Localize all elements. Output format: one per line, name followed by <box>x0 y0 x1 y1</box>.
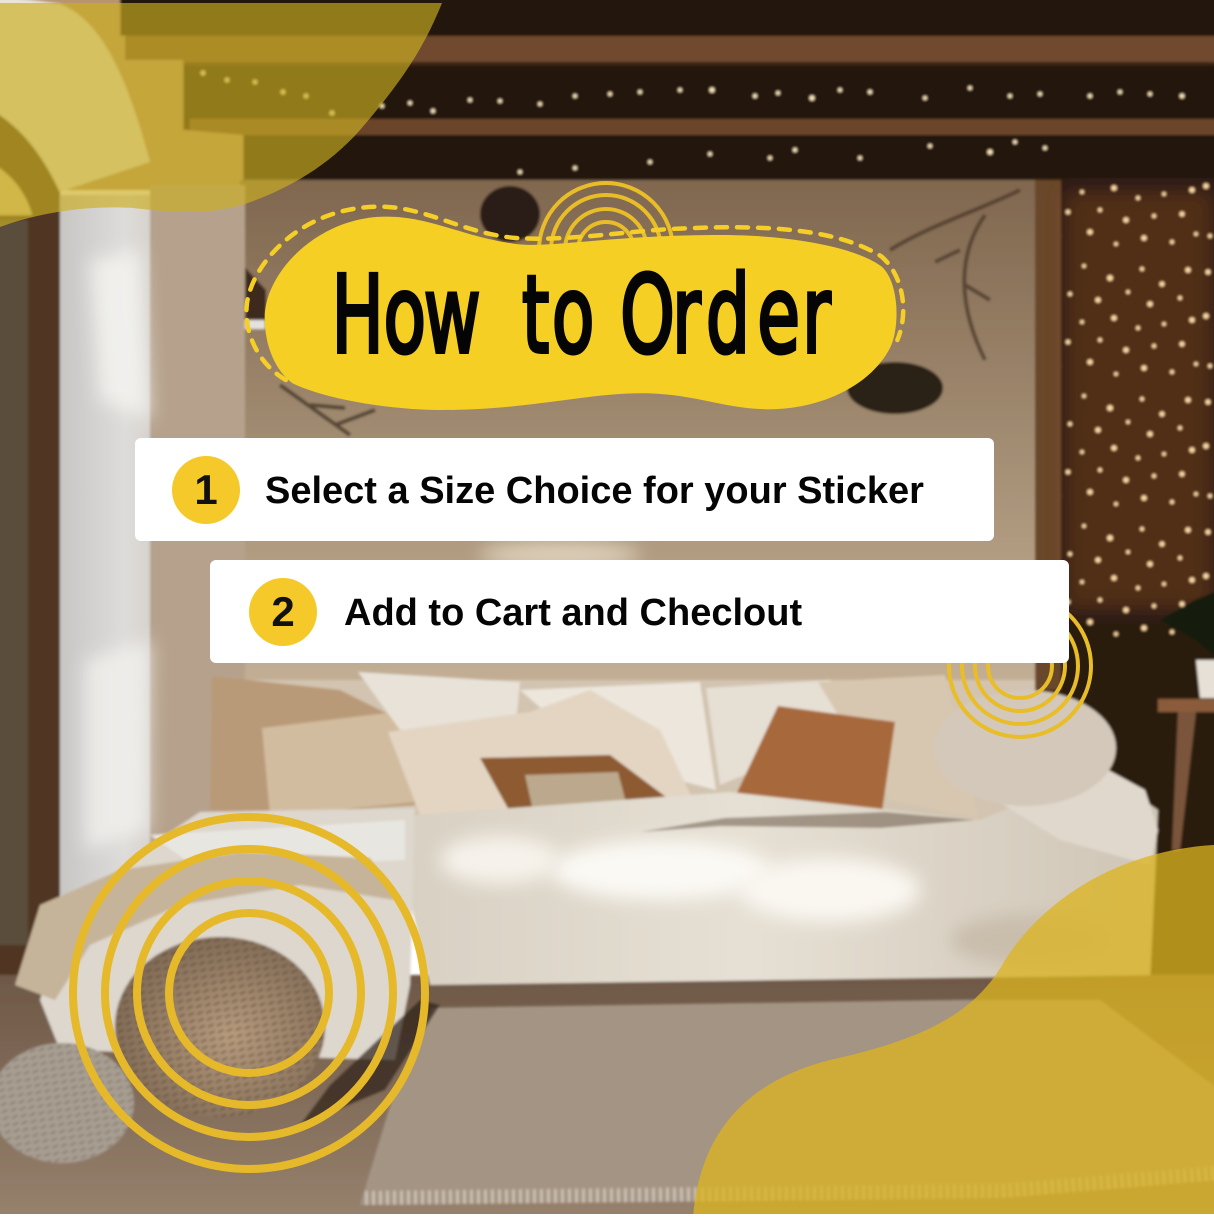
step 2 number: 2 <box>271 588 295 635</box>
rug <box>360 1000 1214 1205</box>
step 2 card <box>210 560 1069 663</box>
step 1 card <box>135 438 994 541</box>
left daybed <box>40 808 415 1060</box>
right dark wall with fairy lights <box>1035 178 1214 1048</box>
fairy light strings on the ceiling <box>201 71 1184 174</box>
hanging plants and vines <box>205 186 1020 435</box>
step 1 number: 1 <box>194 466 218 513</box>
plant and side table <box>1158 590 1214 850</box>
rainbow arcs behind title <box>539 183 673 250</box>
title text: How to Order <box>332 254 831 378</box>
shadow under daybed <box>300 1000 440 1125</box>
knitted pouf <box>115 937 325 1117</box>
concentric rings: right <box>949 595 1091 737</box>
step 2 number <box>249 578 317 646</box>
back cushions and pillows <box>210 672 978 842</box>
ceiling with beams <box>0 0 1214 190</box>
contact shadow under pillows <box>640 812 975 832</box>
throw blanket <box>15 852 395 1000</box>
yellow blob: bottom right <box>693 845 1214 1217</box>
arched ceiling panel <box>0 0 150 192</box>
sun patch on wall <box>480 541 640 569</box>
sofa <box>15 690 1158 1060</box>
dashed outline <box>246 207 903 380</box>
small round pouf <box>0 1043 134 1163</box>
yellow blob: top left <box>0 3 442 227</box>
step 1 number <box>172 456 240 524</box>
step 2 text: Add to Cart and Checlout <box>344 592 802 634</box>
white bottom edge <box>0 1214 1214 1217</box>
floor <box>0 975 1214 1217</box>
title badge <box>246 207 903 410</box>
left wall and window <box>0 112 245 1030</box>
step 1 text: Select a Size Choice for your Sticker <box>265 470 924 512</box>
concentric rings: bottom left <box>73 817 425 1169</box>
shaggy pillow <box>934 690 1116 806</box>
yellow blob <box>265 217 897 410</box>
back wall <box>150 180 1040 840</box>
